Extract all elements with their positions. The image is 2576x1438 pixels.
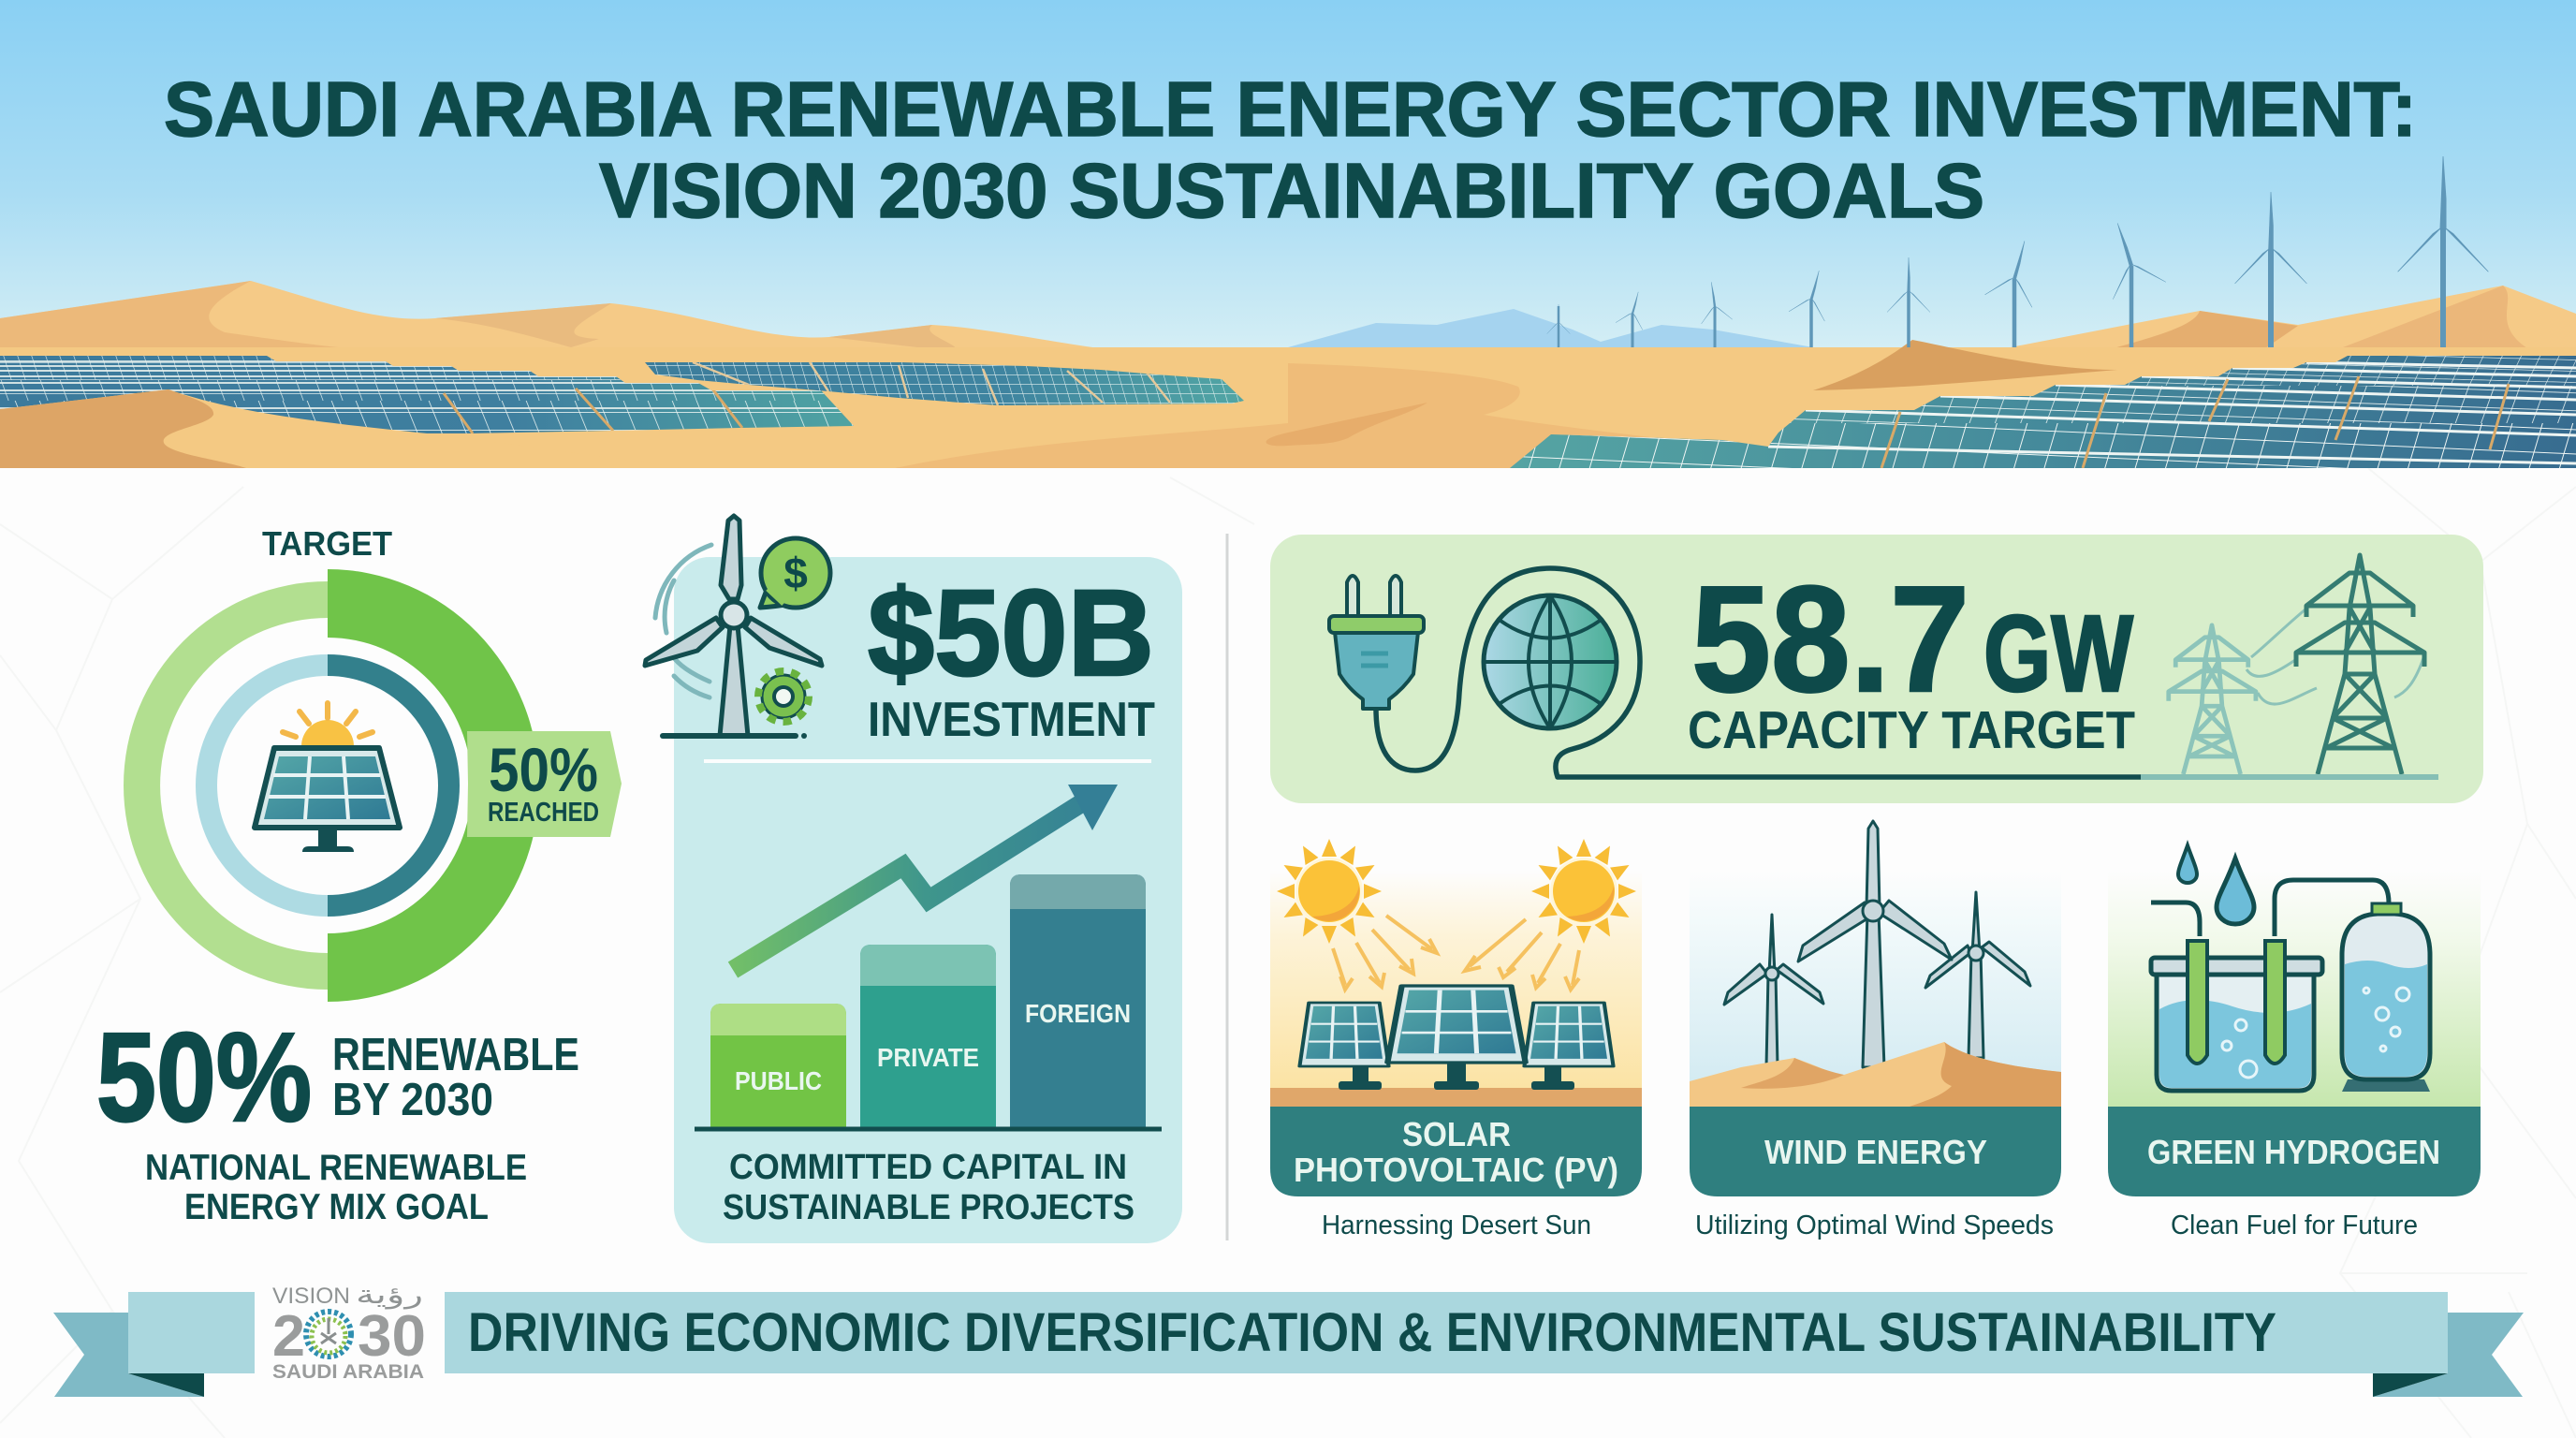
- logo: Vision 2030: VISION: [272, 1284, 350, 1309]
- sand shading: [895, 363, 1741, 468]
- stat: 50%: 50%: [96, 1006, 312, 1148]
- card illustration: [2108, 845, 2481, 1107]
- bar: foreign: [1010, 874, 1146, 1128]
- card title: [1294, 1115, 1618, 1189]
- icon: plug, cord and globe: [1329, 568, 2438, 777]
- caption: committed capital: SUSTAINABLE PROJECTS: [723, 1188, 1134, 1227]
- banner ribbon: [53, 1292, 2524, 1397]
- wind turbines: [1547, 156, 2488, 347]
- card: green hydrogen: [2108, 845, 2481, 1240]
- logo: Vision 2030: رؤية: [356, 1281, 423, 1310]
- card label band: [1270, 1107, 1642, 1196]
- bar: private: [860, 945, 996, 1128]
- ribbon band: [445, 1292, 2448, 1373]
- stat label: renewable by 2030: BY 2030: [332, 1075, 493, 1125]
- title: VISION 2030 SUSTAINABILITY GOALS: [599, 147, 1984, 234]
- stat label: capacity target: CAPACITY TARGET: [1688, 700, 2135, 760]
- bar: foreign: FOREIGN: [1025, 999, 1131, 1028]
- stat: 58.7 GW: 58.7: [1691, 555, 1969, 724]
- stat label: renewable by 2030: RENEWABLE: [332, 1030, 579, 1080]
- bar: private: PRIVATE: [877, 1043, 979, 1072]
- bar: public: PUBLIC: [735, 1066, 822, 1095]
- card: solar photovoltaic: [1270, 839, 1642, 1240]
- banner text: DRIVING ECONOMIC DIVERSIFICATION & ENVIRONMENTAL SUSTAINABILITY: [468, 1302, 2276, 1363]
- callout: 50% reached: 50%: [489, 735, 598, 804]
- distant mountains: [1288, 309, 1813, 347]
- donut chart: [124, 569, 539, 1002]
- card caption: Utilizing Optimal Wind Speeds: [1695, 1211, 2054, 1240]
- card title: GREEN HYDROGEN: [2147, 1133, 2440, 1171]
- logo: Vision 2030: [272, 1281, 426, 1383]
- stat: 58.7 GW: GW: [1983, 593, 2133, 714]
- card label band: [1690, 1107, 2061, 1196]
- icon: wind turbine with dollar and gear: [645, 516, 830, 739]
- sky: [0, 0, 2576, 348]
- bar: public: [710, 1004, 846, 1128]
- dunes left: [0, 281, 1100, 348]
- panel background: [674, 557, 1182, 1243]
- dark central dune: [1813, 340, 2117, 390]
- logo: Vision 2030: SAUDI ARABIA: [272, 1361, 424, 1383]
- logo: Vision 2030: 30: [358, 1304, 426, 1369]
- ribbon tail left: [53, 1313, 204, 1397]
- foreground dune left: [0, 389, 681, 468]
- card title: SOLAR: [1402, 1115, 1511, 1153]
- chart: capital growth bars: [695, 785, 1162, 1129]
- callout: 50% reached: REACHED: [488, 798, 599, 828]
- solar field middle: [645, 362, 1244, 405]
- stat: 58.7 GW: [1691, 555, 2133, 724]
- callout: 50% reached: [467, 731, 622, 837]
- header: desert landscape: [0, 0, 2576, 470]
- icon: power transmission towers: [2169, 555, 2424, 774]
- card: wind energy: [1690, 821, 2061, 1240]
- icon: wind turbine with dollar and gear: $: [783, 549, 808, 597]
- icon: solar panel with sun: [255, 703, 400, 852]
- card label band: [2108, 1107, 2481, 1196]
- solar field right: [1498, 354, 2576, 470]
- caption: committed capital: COMMITTED CAPITAL IN: [729, 1148, 1127, 1187]
- panel: $50B investment: [645, 516, 1182, 1243]
- caption: national mix goal: NATIONAL RENEWABLE: [145, 1148, 527, 1188]
- stat label: investment: INVESTMENT: [868, 693, 1155, 747]
- stat label: renewable by 2030: [332, 1030, 579, 1125]
- title: [164, 66, 2417, 234]
- ribbon tail right: [2373, 1313, 2524, 1397]
- arrow: upward trend: [733, 785, 1118, 970]
- sand ground: [0, 347, 2576, 468]
- dunes right: [2011, 286, 2576, 348]
- label: target: TARGET: [262, 524, 392, 563]
- card caption: Harnessing Desert Sun: [1322, 1211, 1591, 1240]
- card caption: Clean Fuel for Future: [2171, 1211, 2418, 1240]
- card title: PHOTOVOLTAIC (PV): [1294, 1151, 1618, 1189]
- caption: national mix goal: ENERGY MIX GOAL: [184, 1187, 489, 1227]
- panel: 58.7 GW capacity target: [1270, 535, 2483, 803]
- panel: 50% renewable target: [96, 524, 622, 1227]
- card illustration: [1270, 839, 1642, 1108]
- card title: WIND ENERGY: [1764, 1133, 1987, 1171]
- card illustration: [1690, 821, 2061, 1107]
- title: SAUDI ARABIA RENEWABLE ENERGY SECTOR INVESTMENT:: [164, 66, 2417, 153]
- caption: committed capital: [723, 1148, 1134, 1227]
- caption: national mix goal: [145, 1148, 527, 1227]
- panel background: [1270, 535, 2483, 803]
- solar field left: [0, 354, 861, 438]
- logo: Vision 2030: 2: [272, 1304, 305, 1369]
- stat: $50B: $50B: [868, 564, 1154, 701]
